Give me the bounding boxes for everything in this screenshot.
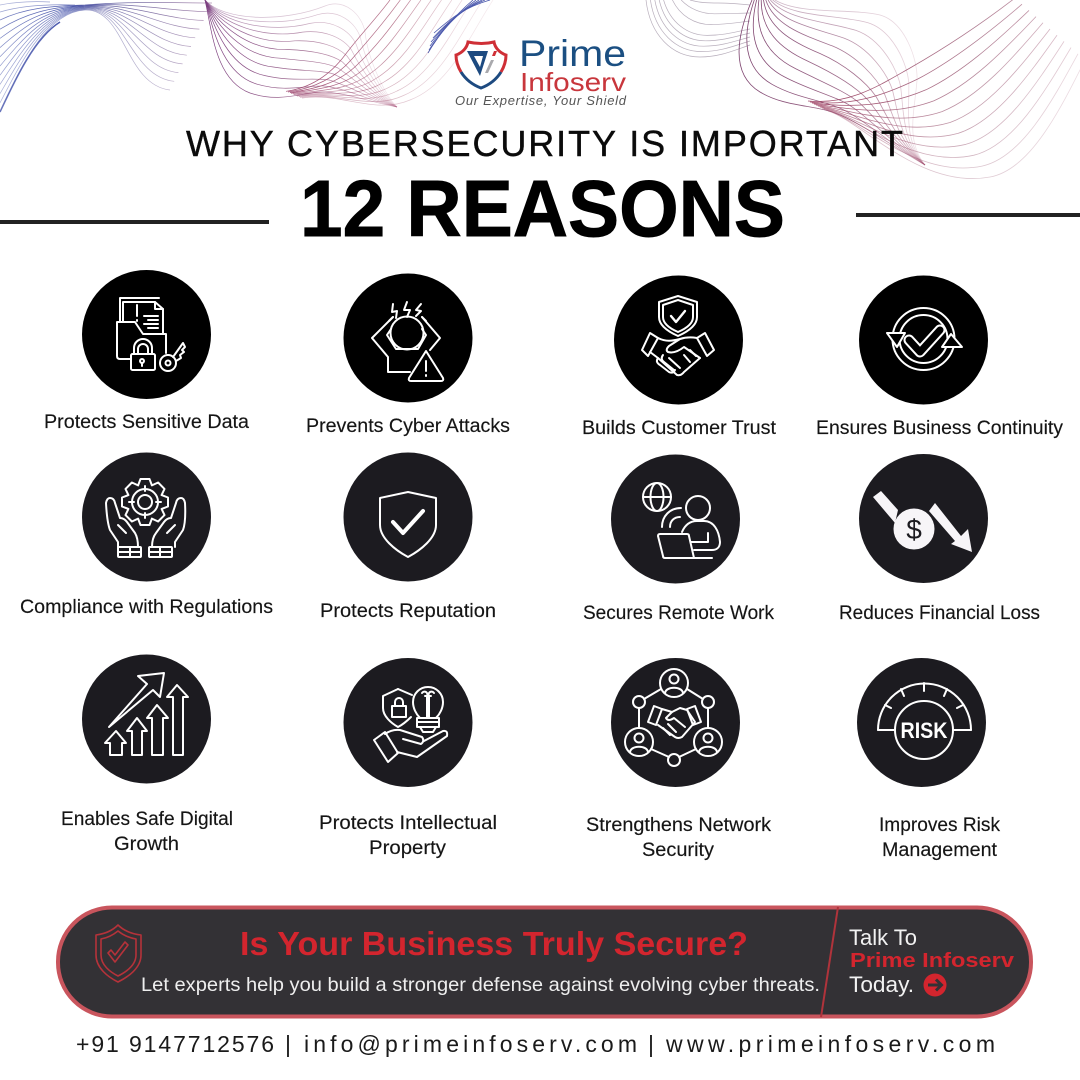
call to action banner (58, 907, 1031, 1017)
logo: Prime Infoserv (455, 33, 627, 108)
decorative wave: small blue strands near logo (428, 0, 490, 53)
banner headline: Is Your Business Truly Secure? (240, 925, 748, 962)
item 3: builds customer trust (582, 276, 777, 439)
icon: hand with shield and bulb (344, 658, 472, 787)
icon: network of people with handshake (611, 658, 740, 787)
item 2: prevents cyber attacks (306, 274, 510, 437)
item 1: protects sensitive data (44, 270, 249, 433)
item 11: strengthens network security (586, 658, 772, 861)
footer contact line (76, 1031, 995, 1057)
item 6: protects reputation (320, 452, 496, 622)
label: Prevents Cyber Attacks (306, 416, 510, 437)
icon: red shield check (96, 925, 141, 982)
icon: growth arrows (82, 654, 211, 784)
label: Strengthens Network (586, 815, 772, 836)
decorative wave: far right rising ribbon (808, 0, 1080, 179)
footer contact line: | (648, 1031, 654, 1057)
logo wordmark Infoserv: Infoserv (520, 67, 626, 97)
icon: folder with lock and key (82, 270, 211, 399)
decorative wave: centre left purple ribbon (205, 0, 397, 107)
item 10: protects intellectual property (319, 658, 497, 859)
right heading rule (856, 213, 1080, 217)
item 4: ensures business continuity (816, 276, 1064, 439)
decorative wave: centre rising ribbon (286, 0, 493, 105)
icon: risk gauge (857, 658, 986, 787)
icon: cycle check (859, 276, 988, 404)
icon: hands holding gear (82, 452, 211, 582)
item 9: enables safe digital growth (61, 654, 233, 855)
heading: why cybersecurity is important: WHY CYBERSECURITY IS IMPORTANT (186, 123, 903, 164)
label: Secures Remote Work (583, 603, 774, 624)
label: Improves Risk (879, 815, 1000, 836)
talk to: Talk To (849, 925, 917, 950)
icon: dollar with falling arrow: $ (906, 514, 922, 545)
today: Today. (849, 972, 914, 997)
footer contact line: +91 9147712576 (76, 1031, 274, 1057)
footer contact line: info@primeinfoserv.com (304, 1031, 637, 1057)
label line 2: Property (369, 838, 447, 859)
prime infoserv: Prime Infoserv (850, 950, 1015, 972)
icon: stressed person with warning (344, 274, 472, 402)
label: Ensures Business Continuity (816, 418, 1064, 439)
item 8: reduces financial loss (839, 454, 1040, 624)
icon: risk gauge: RISK (900, 718, 948, 743)
icon: dollar with falling arrow (859, 454, 988, 583)
decorative wave: top right faint ribbon (646, 0, 750, 57)
logo shield emblem (456, 42, 506, 88)
banner divider (821, 907, 838, 1017)
label: Protects Intellectual (319, 813, 497, 834)
footer contact line: www.primeinfoserv.com (665, 1031, 995, 1057)
icon: shield and handshake (614, 276, 743, 404)
icon: remote worker with globe (611, 454, 740, 584)
heading: 12 reasons: 12 REASONS (300, 164, 785, 253)
item 5: compliance with regulations (20, 452, 273, 618)
label: Compliance with Regulations (20, 597, 273, 618)
label: Reduces Financial Loss (839, 603, 1040, 624)
label line 2: Management (882, 840, 998, 861)
label line 2: Growth (114, 834, 179, 855)
decorative wave: top left blue ribbon (0, 2, 212, 112)
logo tagline: Our Expertise, Your Shield (455, 93, 627, 108)
label line 2: Security (642, 840, 715, 861)
label: Builds Customer Trust (582, 418, 777, 439)
left heading rule (0, 220, 269, 224)
logo wordmark Prime: Prime (519, 33, 626, 74)
decorative wave: right curling ribbon (739, 0, 925, 165)
footer contact line: | (285, 1031, 291, 1057)
icon: shield check (344, 452, 472, 582)
item 7: secures remote work (583, 454, 774, 624)
item 12: improves risk management (857, 658, 1000, 861)
banner subtext: Let experts help you build a stronger defense against evolving cyber threats. (141, 974, 820, 996)
label: Protects Reputation (320, 601, 496, 622)
icon: arrow button (924, 974, 946, 996)
label: Enables Safe Digital (61, 809, 233, 830)
label: Protects Sensitive Data (44, 412, 249, 433)
banner pill (58, 908, 1031, 1016)
